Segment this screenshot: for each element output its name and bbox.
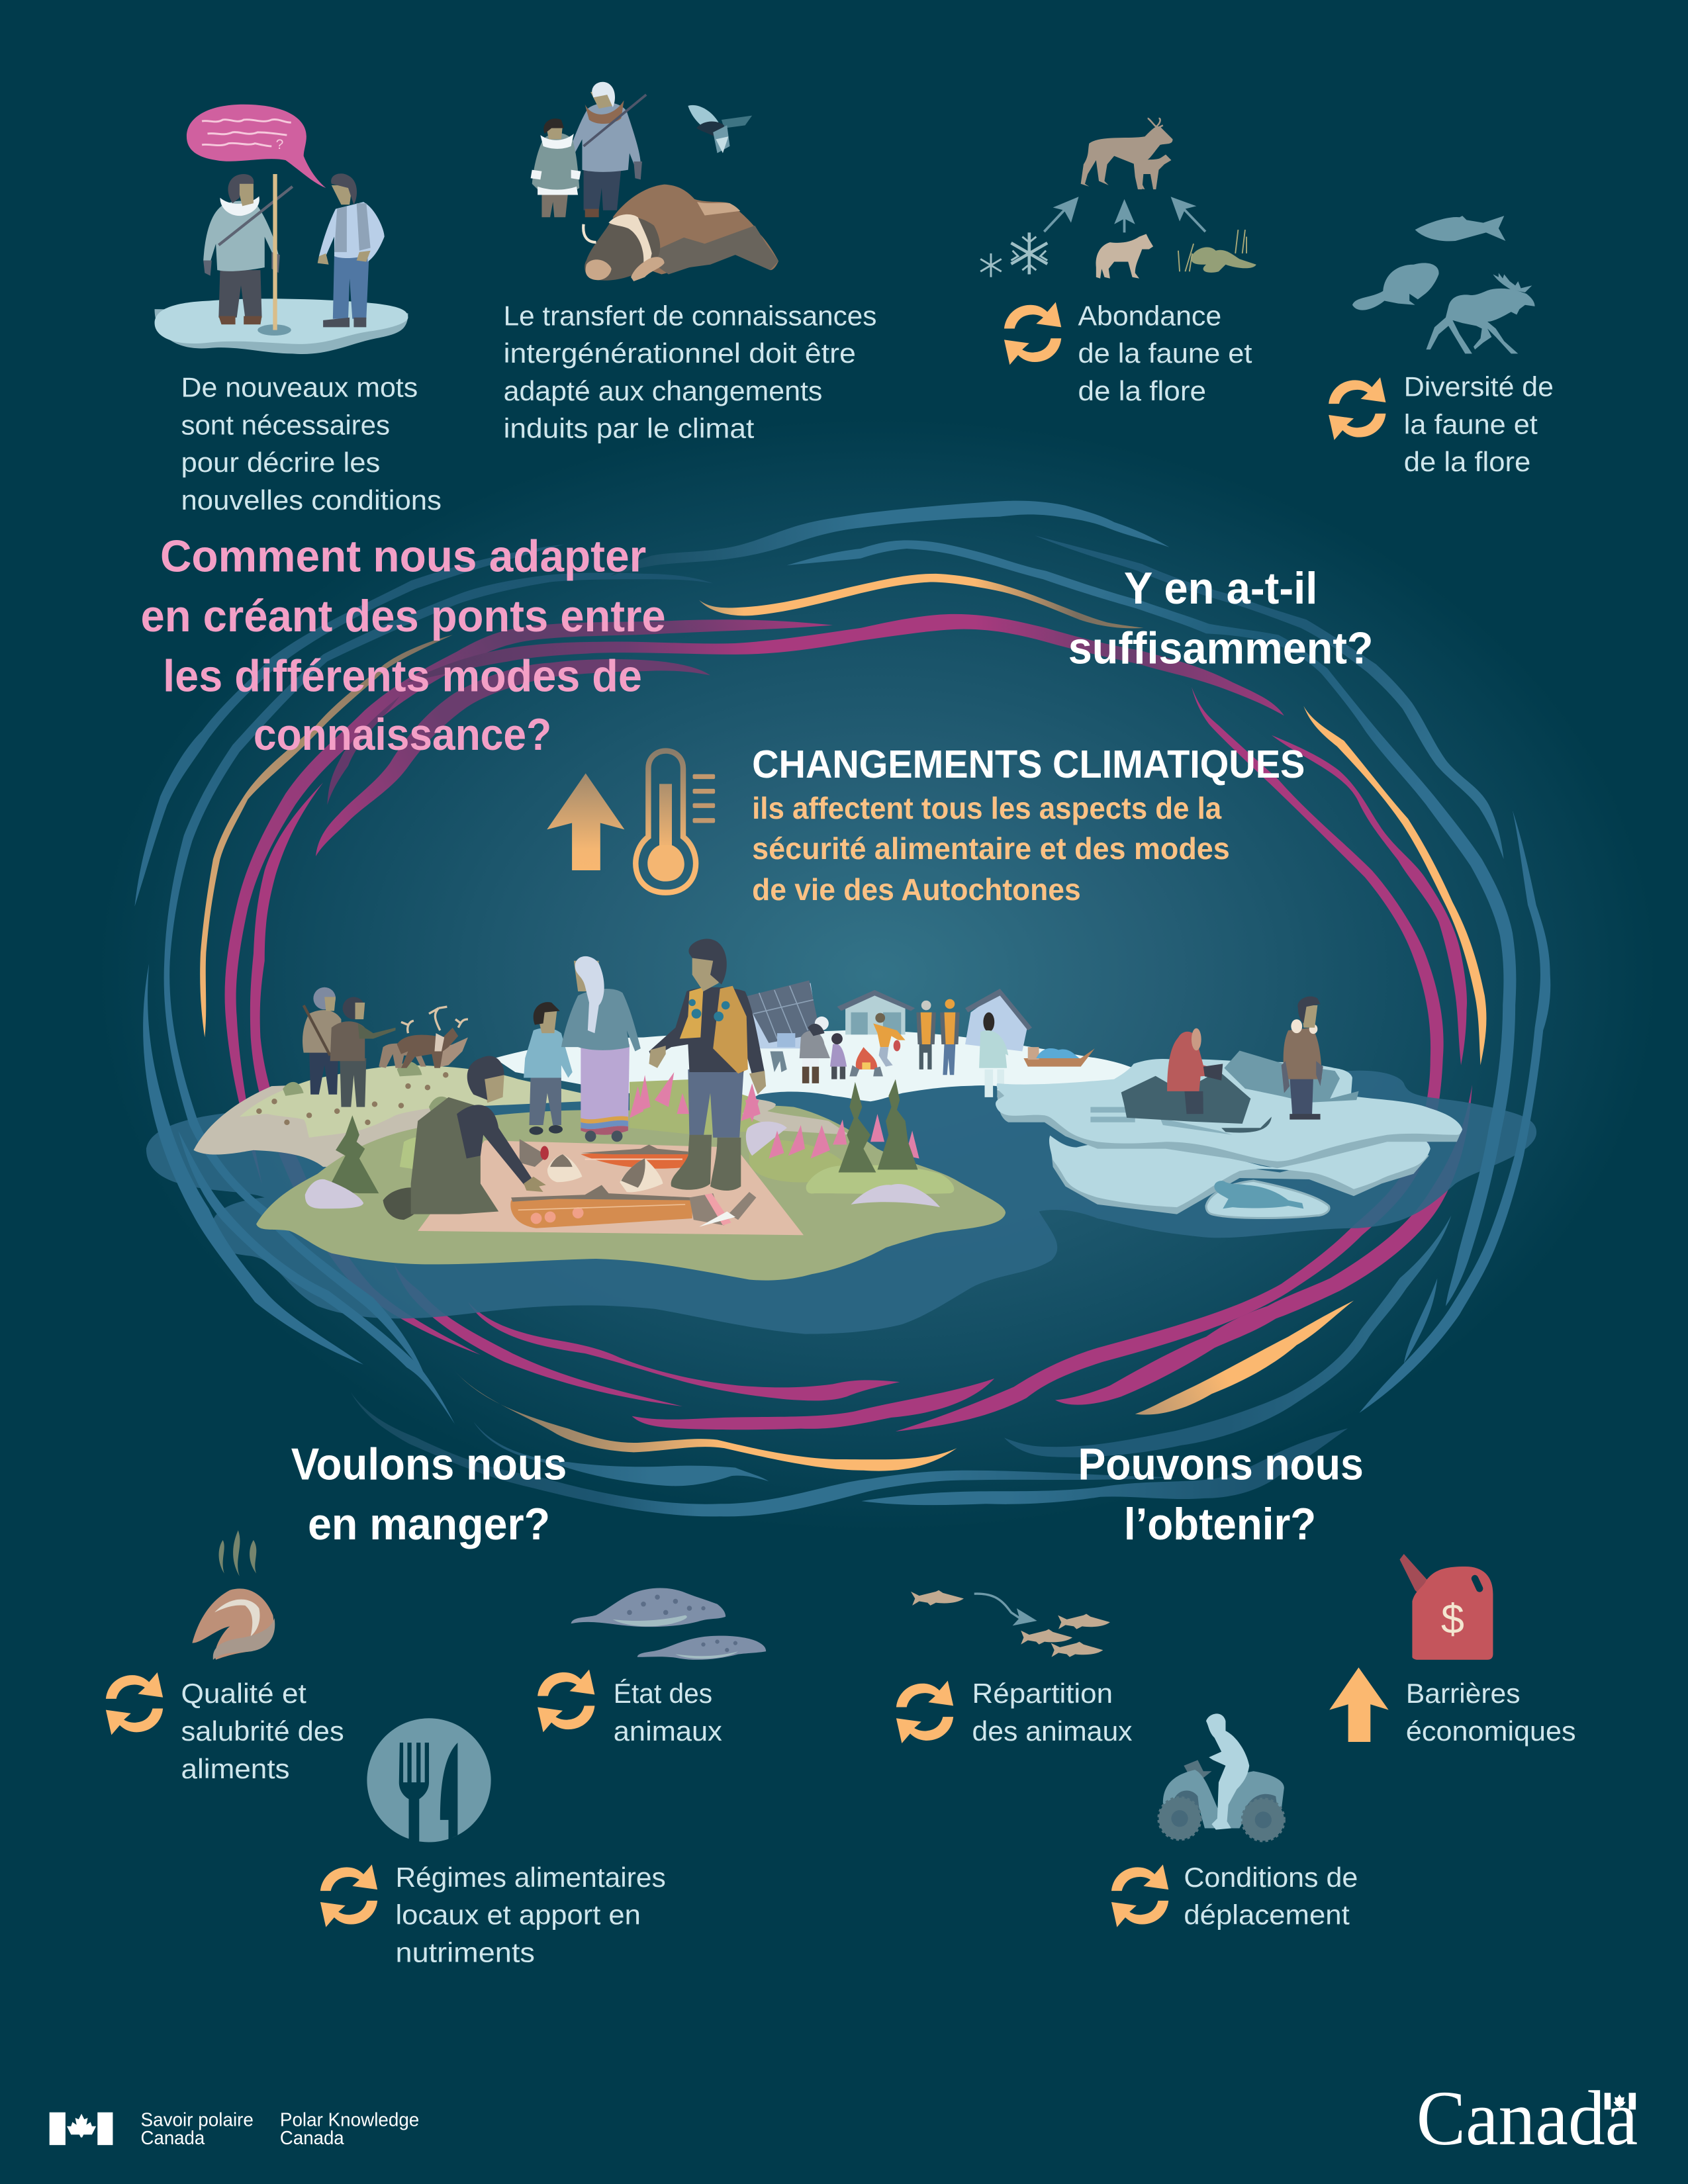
icon: up arrow economic	[1329, 1667, 1389, 1742]
icon: two seals	[571, 1588, 766, 1660]
person left	[218, 270, 262, 318]
text: nouveaux mots	[181, 372, 442, 516]
text: Savoir polaire Canada: Savoir polaire	[140, 2110, 254, 2131]
seal on small floe	[1214, 1181, 1303, 1208]
heading: comment nous adapter: connaissance?	[254, 710, 551, 760]
fish head 1	[547, 1154, 582, 1182]
text: régimes alimentaires	[396, 1862, 666, 1968]
icon: fish, beaver and moose	[1352, 216, 1535, 353]
text: qualité: Qualité et	[181, 1678, 306, 1709]
heading: comment nous adapter: les différents modes de	[163, 652, 642, 702]
text: état des animaux: animaux	[614, 1715, 722, 1747]
moss and grass	[1191, 247, 1256, 273]
lower fillet	[510, 1197, 692, 1228]
text: régimes alimentaires: nutriments	[396, 1936, 535, 1968]
logo: Canada wordmark: Canada	[1417, 2075, 1638, 2161]
scene: back houses	[744, 980, 1032, 1051]
text: diversité: la faune et	[1404, 408, 1538, 439]
person: kneeling man	[383, 1056, 546, 1220]
scene: main green island	[256, 1105, 1006, 1281]
scene: small community figures	[770, 999, 1095, 1097]
water around the land	[146, 1071, 1536, 1334]
text: Savoir polaire Canada	[140, 2110, 254, 2149]
subtitle: effects: de vie des Autochtones	[752, 872, 1081, 907]
icon: refresh État	[538, 1670, 594, 1732]
text: état des animaux: État des	[614, 1678, 712, 1709]
text: conditions de déplacement	[1184, 1862, 1358, 1931]
text: Polar Knowledge Canada: Canada	[280, 2128, 344, 2149]
text: barrières économiques: Barrières	[1406, 1678, 1520, 1709]
icon: fuel can with dollar	[1399, 1554, 1493, 1660]
scene: back hill with sand	[193, 1062, 613, 1169]
text: transfert de connaissances: adapté aux changements	[504, 375, 822, 406]
muskox	[613, 185, 778, 274]
text: nouveaux mots: sont nécessaires	[181, 409, 390, 440]
icon: refresh Répartition	[896, 1680, 953, 1743]
text: Savoir polaire Canada: Canada	[140, 2128, 205, 2149]
ribbons: blue ring	[134, 501, 1550, 1516]
text: diversité	[1404, 371, 1554, 477]
text: répartition	[972, 1678, 1133, 1747]
scene: rug with fish	[418, 1139, 804, 1235]
text: abondance	[1078, 300, 1252, 406]
central glow	[0, 348, 1688, 1602]
icon: refresh Régimes	[320, 1864, 377, 1927]
knife	[699, 1192, 756, 1227]
scene: sled with blue tent	[1023, 1047, 1095, 1067]
subtitle: effects: ils affectent tous les aspects de la	[752, 791, 1222, 825]
icon: magpie	[688, 105, 752, 153]
scene: ice floes	[996, 1059, 1462, 1218]
scene: rock left	[305, 1179, 363, 1208]
text: abondance: Abondance	[1078, 300, 1221, 331]
heading: comment nous adapter: en créant des ponts entre	[140, 592, 666, 641]
wolf	[1096, 234, 1153, 279]
heading: changements climatiques: CHANGEMENTS CLIMATIQUES	[752, 743, 1305, 786]
text: nouveaux mots: nouvelles conditions	[181, 484, 442, 516]
heading: pouvons nous l'obtenir: Pouvons nous	[1078, 1439, 1364, 1489]
text: nouveaux mots: De nouveaux mots	[181, 372, 418, 403]
text: régimes alimentaires: locaux et apport en	[396, 1899, 641, 1931]
icon: abundance food web	[980, 118, 1256, 279]
person: snowmobile rider	[1090, 1028, 1272, 1135]
icon: thermometer	[635, 751, 715, 893]
fish head 2	[620, 1158, 663, 1192]
ribbons: magenta and orange ring	[200, 574, 1486, 1471]
upper fillet	[581, 1151, 688, 1169]
text: transfert de connaissances: Le transfert de connaissances	[504, 300, 876, 331]
scene: fireweed	[630, 1072, 919, 1158]
text: diversité: de la flore	[1404, 446, 1530, 477]
scene: two hunters	[303, 987, 396, 1107]
heading: pouvons nous l'obtenir: l’obtenir?	[1124, 1500, 1316, 1549]
snowflakes	[1011, 232, 1047, 274]
text: nouveaux mots: pour décrire les	[181, 447, 380, 478]
text: barrières économiques	[1406, 1678, 1576, 1747]
heading: comment nous adapter	[140, 532, 666, 760]
subtitle: effects: sécurité alimentaire et des modes	[752, 831, 1230, 866]
icon: ATV rider	[1158, 1713, 1284, 1841]
icon: up arrow temperature	[547, 774, 624, 870]
scene: bright grass and sand	[400, 1079, 954, 1207]
pole	[273, 174, 277, 330]
heading: voulons nous en manger: en manger?	[308, 1500, 550, 1549]
arrows	[1044, 209, 1066, 232]
icon: steam and salmon steak	[192, 1530, 275, 1660]
heading: voulons nous en manger	[291, 1439, 567, 1549]
icon: refresh Conditions	[1111, 1864, 1168, 1927]
person: elder woman	[561, 956, 641, 1142]
icon: fish shifting distribution	[911, 1590, 1110, 1657]
text: barrières économiques: économiques	[1406, 1715, 1576, 1747]
heading: voulons nous en manger: Voulons nous	[291, 1439, 567, 1489]
text: qualité: salubrité des	[181, 1715, 344, 1747]
icon: refresh Diversité	[1329, 377, 1385, 440]
heading: y en a-t-il suffisamment: Y en a-t-il	[1124, 564, 1317, 614]
scene: snow ground	[494, 1030, 1142, 1107]
text: Polar Knowledge Canada	[280, 2110, 419, 2149]
text: Polar Knowledge Canada: Polar Knowledge	[280, 2110, 419, 2131]
text: abondance: de la faune et	[1078, 338, 1252, 369]
text: répartition: Répartition	[972, 1678, 1113, 1709]
text: transfert de connaissances	[504, 300, 876, 444]
text: qualité: aliments	[181, 1753, 290, 1784]
text: régimes alimentaires: Régimes alimentaires	[396, 1862, 666, 1893]
icon: elder, child and muskox	[531, 82, 778, 281]
icon: ice floe with two people talking	[155, 173, 408, 354]
text: conditions de déplacement: Conditions de	[1184, 1862, 1358, 1893]
text: conditions de déplacement: déplacement	[1184, 1899, 1350, 1931]
icon: refresh Qualité	[106, 1672, 163, 1735]
scene: back snowmobile	[1224, 1050, 1359, 1103]
person: standing man in brown parka	[1282, 997, 1323, 1120]
caribou	[1081, 126, 1173, 189]
text: état des animaux	[614, 1678, 722, 1747]
heading: comment nous adapter: Comment nous adapter	[160, 532, 646, 582]
subtitle: effects	[752, 791, 1230, 907]
text: transfert de connaissances: intergénérationnel doit être	[504, 338, 856, 369]
heading: pouvons nous l'obtenir	[1078, 1439, 1364, 1549]
person: child	[524, 1002, 573, 1135]
icon: speech bubble with question: ?	[276, 137, 283, 152]
icon: fork and knife in circle	[367, 1718, 491, 1843]
icon: refresh Abondance	[1004, 302, 1061, 365]
footprints on the hill	[256, 1072, 448, 1125]
text: transfert de connaissances: induits par le climat	[504, 413, 755, 444]
scene: caribou herd	[379, 1007, 468, 1068]
person right	[333, 255, 369, 319]
icon: fuel can with dollar: $	[1441, 1596, 1464, 1643]
text: répartition: des animaux	[972, 1715, 1133, 1747]
heading: y en a-t-il suffisamment	[1068, 564, 1374, 674]
logo: Canada flag signature	[50, 2113, 113, 2145]
scene: spruce trees	[327, 1079, 918, 1193]
icon: speech bubble with question	[187, 105, 326, 188]
heading: y en a-t-il suffisamment: suffisamment?	[1068, 624, 1374, 674]
text: diversité: Diversité de	[1404, 371, 1554, 402]
text: qualité	[181, 1678, 344, 1784]
text: abondance: de la flore	[1078, 375, 1206, 406]
person: man in beaded vest	[649, 939, 766, 1191]
